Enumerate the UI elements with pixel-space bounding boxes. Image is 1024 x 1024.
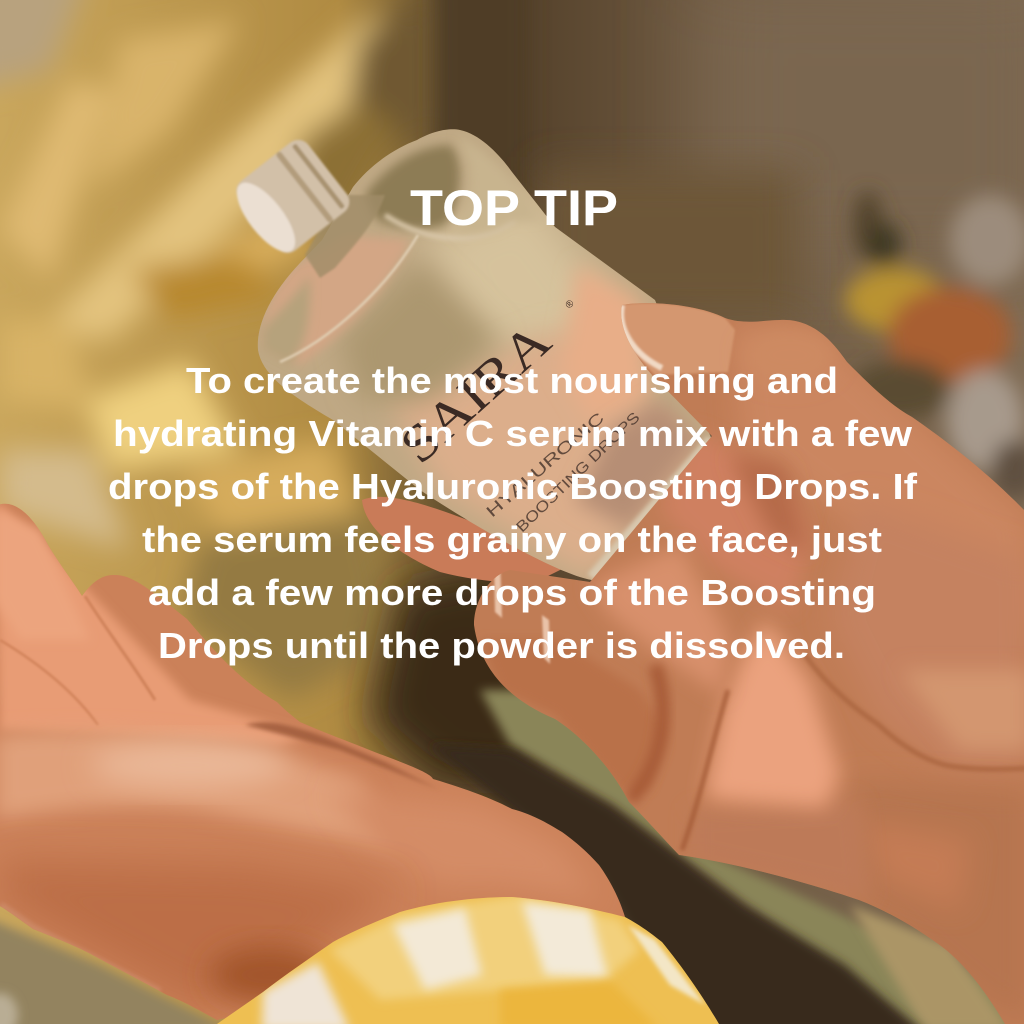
bottom left pale spot — [0, 993, 18, 1024]
fingers behind bottle — [362, 497, 580, 585]
finger shadow — [245, 722, 440, 790]
fingers — [0, 500, 310, 745]
left hand — [0, 495, 635, 1024]
cap thread — [292, 143, 345, 209]
wrist shade — [712, 860, 837, 893]
tip paragraph: To create the most nourishing and — [186, 360, 838, 401]
lower palm — [868, 794, 1019, 1002]
dark blur between hands — [370, 570, 560, 780]
finger nail tips — [494, 558, 502, 618]
bottle neck — [305, 195, 385, 278]
base ellipse — [262, 235, 410, 365]
thumb pad — [486, 642, 653, 786]
serum bottle — [258, 129, 711, 580]
inner fingers — [666, 434, 802, 600]
light sleeve band — [330, 895, 640, 1000]
shoulder rim — [385, 215, 515, 238]
shoulder window — [365, 145, 460, 229]
upper hand light — [743, 354, 1024, 546]
title: TOP TIP — [410, 180, 618, 236]
tip paragraph: add a few more drops of the Boosting — [148, 572, 876, 613]
lower palm warm — [876, 828, 963, 898]
heel highlight — [900, 670, 1024, 750]
counter band — [480, 690, 1024, 1024]
heart crease — [805, 655, 1024, 769]
counter warm tone — [850, 905, 1010, 1024]
palm sheen — [90, 743, 290, 787]
tip paragraph: drops of the Hyaluronic Boosting Drops. If — [108, 466, 918, 507]
right palm — [842, 546, 1022, 758]
lower body peach — [394, 339, 678, 580]
tip paragraph: hydrating Vitamin C serum mix with a few — [113, 413, 913, 454]
bottom left surface — [0, 915, 230, 1024]
bottle cap — [226, 135, 355, 262]
finger gap — [85, 596, 155, 700]
label shadow — [575, 400, 700, 530]
sleeve check — [628, 925, 705, 1005]
thumb nail tip — [621, 305, 662, 368]
finger gap lower — [0, 640, 98, 725]
product label: ® — [564, 298, 577, 311]
sleeve check — [393, 908, 482, 990]
hand edge — [0, 905, 160, 992]
cap thread — [275, 151, 334, 224]
right shoulder — [466, 148, 517, 234]
palm crease — [682, 690, 728, 850]
tip paragraph: the serum feels grainy on the face, just — [142, 519, 882, 560]
mid palm glow — [590, 545, 730, 695]
right hand — [460, 290, 1024, 1024]
finger shade — [734, 456, 806, 550]
sleeve check — [262, 962, 350, 1024]
cap top — [227, 174, 305, 261]
finger light — [0, 514, 77, 634]
thenar light — [330, 790, 600, 900]
product label: BOOSTING DROPS — [513, 409, 643, 536]
base left glass — [262, 275, 310, 365]
product label — [390, 298, 643, 536]
sleeve check — [522, 902, 608, 978]
lower sleeve yellow — [500, 980, 660, 1024]
wrist shadow — [210, 947, 330, 1003]
right glass edge — [592, 440, 712, 578]
bright palm patch — [705, 620, 840, 808]
tip paragraph — [108, 360, 918, 666]
base rim highlight — [280, 235, 418, 362]
tip paragraph: Drops until the powder is dissolved. — [158, 625, 845, 666]
blurred gingham fabric — [0, 0, 440, 700]
thumb base — [621, 303, 735, 375]
gingham sleeve — [210, 890, 730, 1024]
blurred flowers — [845, 191, 1024, 500]
thumb crease — [630, 665, 663, 800]
product label: SAIRA — [390, 312, 562, 475]
product label: HYALURONIC — [483, 410, 608, 521]
back wall and door frame — [435, 0, 530, 310]
palm light — [0, 731, 400, 850]
wrist shade — [0, 860, 400, 1010]
dark counter gap — [430, 745, 925, 1024]
pale body light — [423, 186, 598, 346]
peach refraction strip — [560, 265, 650, 420]
olive body shade — [340, 260, 500, 400]
knuckle — [780, 322, 836, 354]
second nail tip — [542, 615, 550, 664]
